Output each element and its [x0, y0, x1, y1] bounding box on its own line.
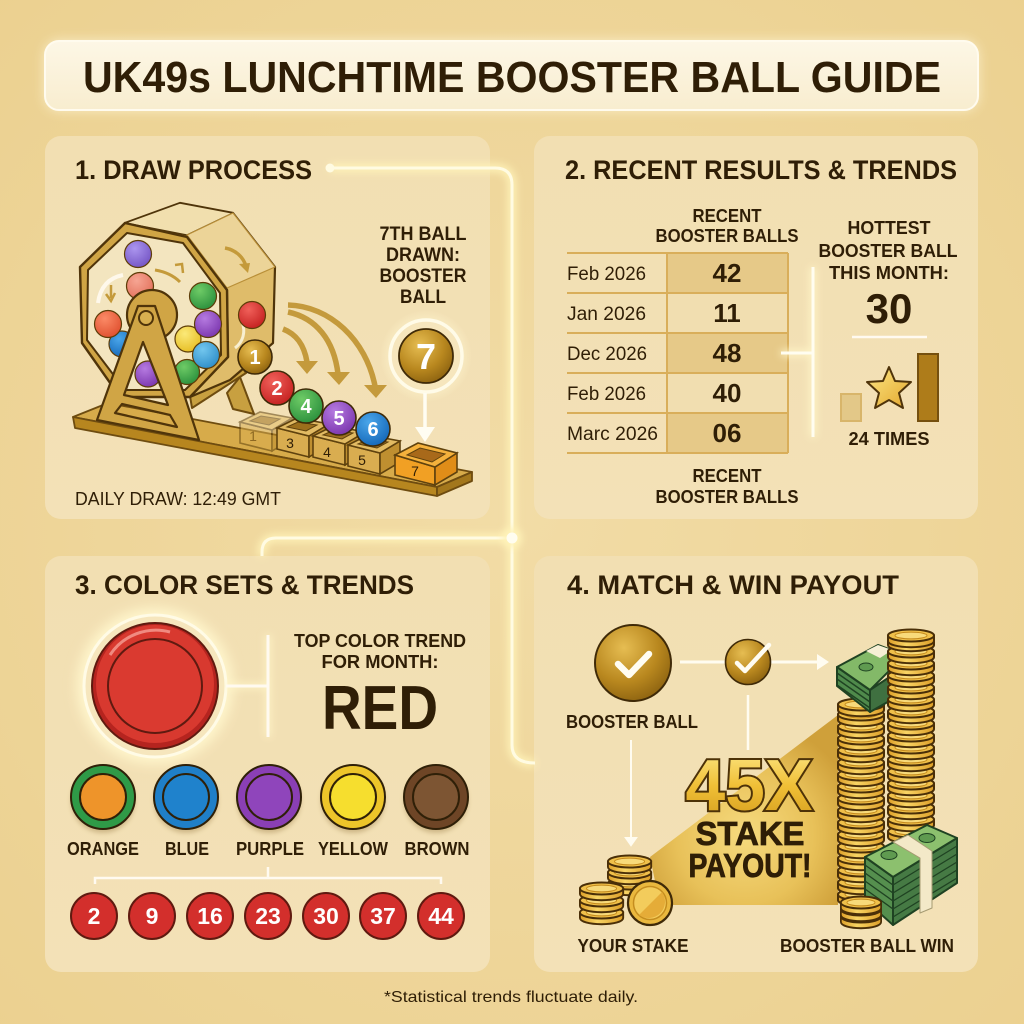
illustration: numbered balls	[238, 340, 390, 446]
coin stack: right	[888, 630, 934, 843]
red number balls: 16	[197, 903, 223, 929]
icon: booster ball check	[595, 625, 671, 701]
illustration: number boxes: 1	[249, 428, 257, 444]
red number balls	[71, 893, 464, 939]
panel: color sets and trends	[45, 556, 490, 972]
results table: Feb 2026	[567, 384, 646, 405]
label: 7th ball drawn: BALL	[400, 287, 446, 308]
red number balls: 37	[370, 903, 396, 929]
glowing connector lines	[262, 164, 535, 763]
divider	[852, 336, 927, 338]
illustration: number boxes: 5	[358, 452, 366, 468]
heading: recent results: 2. RECENT RESULTS & TRENDS	[565, 155, 957, 185]
stake coins	[580, 856, 672, 925]
text: payout multiplier	[686, 746, 812, 884]
heading: color sets: 3. COLOR SETS & TRENDS	[75, 570, 414, 600]
results table: Marc 2026	[567, 424, 658, 445]
red number balls: 2	[88, 903, 100, 929]
color swatches: BLUE	[165, 839, 209, 859]
illustration: lottery drum	[80, 203, 275, 397]
results table: Dec 2026	[567, 344, 647, 365]
labels: stake and win	[578, 936, 954, 956]
results table	[567, 253, 788, 453]
results table: 42	[713, 258, 741, 288]
results table: 40	[713, 378, 741, 408]
icon: booster ball 7: 7	[416, 336, 436, 377]
icon: big red disc	[77, 608, 233, 764]
results table: 06	[713, 418, 741, 448]
connector: red disc to label	[226, 635, 268, 737]
label: 7th ball drawn: 7TH BALL	[380, 224, 467, 245]
top color trend: TOP COLOR TREND	[294, 631, 466, 651]
table caption: BOOSTER BALLS	[656, 487, 798, 507]
table caption: RECENT	[692, 466, 762, 486]
text: payout multiplier: 45X	[686, 746, 812, 826]
illustration: number boxes: 4	[323, 444, 331, 460]
color swatches	[67, 765, 470, 859]
color swatches: YELLOW	[318, 839, 388, 859]
top color trend: RED	[322, 674, 438, 743]
growth triangle	[650, 715, 838, 905]
text: payout multiplier: STAKE	[696, 815, 804, 852]
illustration: rear stand and arm	[190, 364, 254, 414]
illustration: number boxes: 3	[286, 435, 294, 451]
arrow: ball 7 into box	[415, 393, 435, 442]
icon: small check ball	[726, 640, 770, 684]
results table: Feb 2026	[567, 264, 646, 285]
results table: 48	[713, 338, 741, 368]
cash stack: lower	[865, 825, 957, 925]
hottest ball heading	[818, 218, 958, 283]
panel: recent results and trends	[534, 136, 978, 519]
color swatches: BROWN	[404, 839, 470, 859]
panel: draw process	[45, 136, 490, 519]
heading: draw process: 1. DRAW PROCESS	[75, 155, 312, 185]
title banner	[45, 41, 978, 110]
results table: Jan 2026	[567, 304, 646, 325]
results table: 11	[713, 298, 741, 328]
small coin stack	[841, 896, 881, 928]
drum balls	[94, 240, 266, 387]
illustration: arcing arrows	[283, 305, 387, 398]
hottest ball heading: THIS MONTH:	[829, 263, 949, 283]
illustration: numbered balls: 2	[271, 378, 283, 400]
top color trend: FOR MONTH:	[322, 652, 438, 672]
label: 7th ball drawn	[380, 224, 467, 308]
icon: booster ball 7	[380, 310, 472, 402]
top color trend	[294, 631, 466, 743]
label: 7th ball drawn: DRAWN:	[386, 245, 460, 266]
illustration: numbered balls: 6	[367, 419, 379, 441]
labels: stake and win: BOOSTER BALL WIN	[780, 936, 954, 956]
table caption	[656, 466, 798, 507]
red number balls: 44	[428, 903, 454, 929]
hottest number: 30	[866, 285, 912, 332]
illustration: numbered balls: 4	[300, 396, 312, 418]
labels: stake and win: YOUR STAKE	[578, 936, 688, 956]
illustration: machine base	[73, 403, 472, 496]
arrow: booster ball to stake	[626, 740, 636, 845]
illustration: number boxes	[240, 412, 457, 485]
chart: frequency bars with star	[841, 354, 938, 421]
text: payout multiplier: PAYOUT!	[688, 847, 812, 884]
panel: match and win payout	[534, 556, 978, 972]
icon: star	[867, 367, 911, 408]
table heading	[656, 206, 798, 246]
hottest count: 24 TIMES	[848, 429, 930, 449]
connector: table to hottest ball	[781, 267, 813, 437]
footnote: *Statistical trends fluctuate daily.	[384, 989, 638, 1006]
title: UK49s LUNCHTIME BOOSTER BALL GUIDE	[83, 53, 941, 102]
red number balls: 30	[313, 903, 339, 929]
heading: match and win: 4. MATCH & WIN PAYOUT	[567, 570, 900, 600]
table heading: BOOSTER BALLS	[656, 226, 798, 246]
color swatches: PURPLE	[236, 839, 304, 859]
hottest ball heading: BOOSTER BALL	[818, 241, 958, 261]
connector: check to payout	[747, 695, 749, 750]
number bracket	[95, 867, 441, 884]
label: 7th ball drawn: BOOSTER	[380, 266, 467, 287]
text: daily draw time: DAILY DRAW: 12:49 GMT	[75, 489, 281, 509]
red number balls: 9	[146, 903, 158, 929]
color swatches: ORANGE	[67, 839, 139, 859]
cash stack: upper	[837, 645, 905, 712]
illustration: A-frame stand	[97, 290, 199, 440]
hottest ball heading: HOTTEST	[848, 218, 931, 238]
red number balls: 23	[255, 903, 281, 929]
illustration: numbered balls: 1	[249, 347, 261, 369]
illustration: number boxes: 7	[411, 463, 419, 479]
label: booster ball: BOOSTER BALL	[566, 712, 698, 732]
coin stack: left	[838, 698, 884, 906]
illustration: numbered balls: 5	[333, 408, 345, 430]
arrow: ball to check to stacks	[680, 654, 829, 670]
table heading: RECENT	[692, 206, 762, 226]
